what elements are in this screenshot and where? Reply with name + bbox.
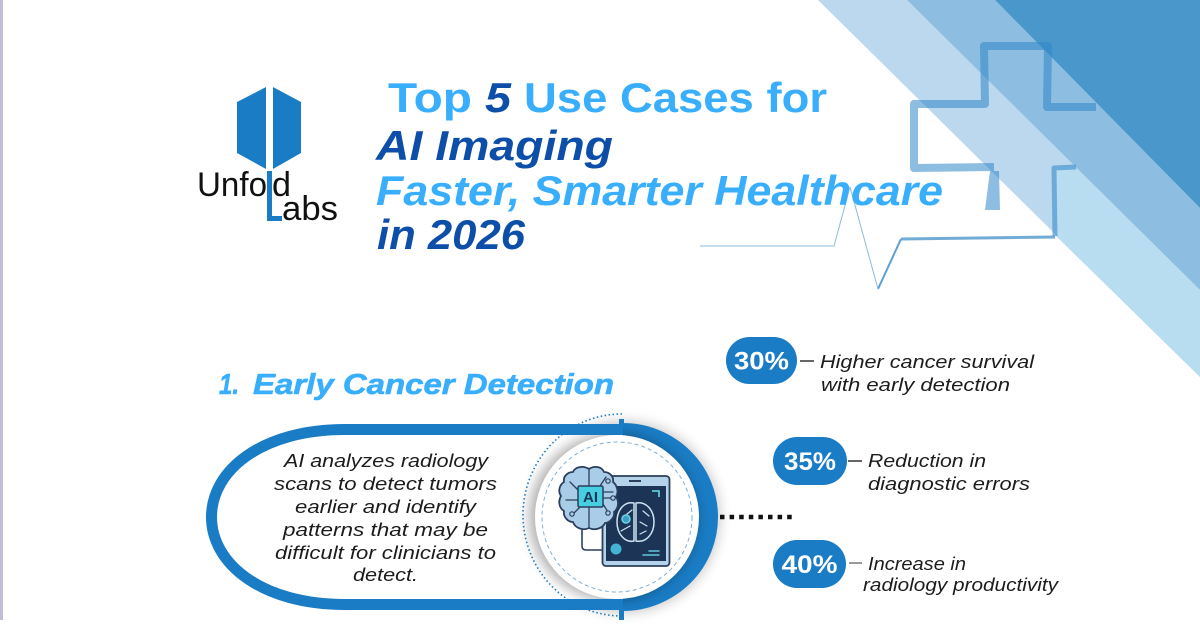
inner circle shadow xyxy=(529,433,697,601)
stat: 30% xyxy=(726,337,1035,395)
description text: detect. xyxy=(353,564,418,585)
capsule outline xyxy=(212,430,712,604)
logo wordmark xyxy=(197,166,338,228)
description text xyxy=(274,450,497,585)
logo wordmark: Unfo xyxy=(197,166,267,204)
stat: 30%: with early detection xyxy=(821,374,1010,395)
description text: difficult for clinicians to xyxy=(275,542,496,563)
stat: 35% xyxy=(773,437,1030,494)
stat: 35%: 35% xyxy=(784,448,836,476)
stat: 30%: Higher cancer survival xyxy=(820,351,1035,372)
stat: 35%: Reduction in xyxy=(868,450,986,471)
left edge strip xyxy=(0,0,3,620)
capsule edge restored over shadow xyxy=(500,430,623,604)
stat: 30%: 30% xyxy=(734,348,789,376)
brain on screen xyxy=(617,503,654,541)
icon: AI brain and tablet scan xyxy=(559,467,670,566)
logo wordmark: abs xyxy=(282,190,338,228)
blue crescent behind circle xyxy=(623,423,717,611)
stat: 35%: diagnostic errors xyxy=(868,473,1030,494)
lower right light band area xyxy=(1056,166,1200,377)
capsule shadow xyxy=(528,421,720,613)
logo wordmark: d xyxy=(272,166,291,204)
medical cross outline with heartbeat line xyxy=(700,46,1096,289)
dotted connector xyxy=(720,515,793,519)
stat: 40%: 40% xyxy=(782,551,838,579)
tick marks xyxy=(619,419,624,620)
description text: AI analyzes radiology xyxy=(283,450,490,471)
wire xyxy=(582,530,604,550)
title: Faster, Smarter Healthcare xyxy=(376,167,943,214)
stat: 40%: radiology productivity xyxy=(863,574,1060,595)
stat: 40%: Increase in xyxy=(868,553,966,574)
logo mark xyxy=(237,87,301,169)
dotted outer ring xyxy=(523,414,622,616)
title xyxy=(375,74,943,258)
title: in 2026 xyxy=(377,211,526,258)
tablet xyxy=(602,476,670,566)
title: AI Imaging xyxy=(375,122,613,169)
description text: earlier and identify xyxy=(295,496,478,517)
title: 5 xyxy=(485,74,512,121)
section heading: 1. xyxy=(219,369,239,401)
section heading: Early Cancer Detection xyxy=(253,369,614,401)
corner diagonal bands xyxy=(818,0,1200,377)
stat: 40% xyxy=(773,540,1060,595)
logo: Unfold Labs xyxy=(197,87,338,228)
inner circle xyxy=(535,435,699,599)
description text: patterns that may be xyxy=(282,519,488,540)
title: Top xyxy=(388,74,472,121)
title: Use Cases for xyxy=(524,74,827,121)
brain with AI chip: AI xyxy=(583,489,598,506)
description text: scans to detect tumors xyxy=(274,473,497,494)
use case capsule panel xyxy=(212,414,720,620)
